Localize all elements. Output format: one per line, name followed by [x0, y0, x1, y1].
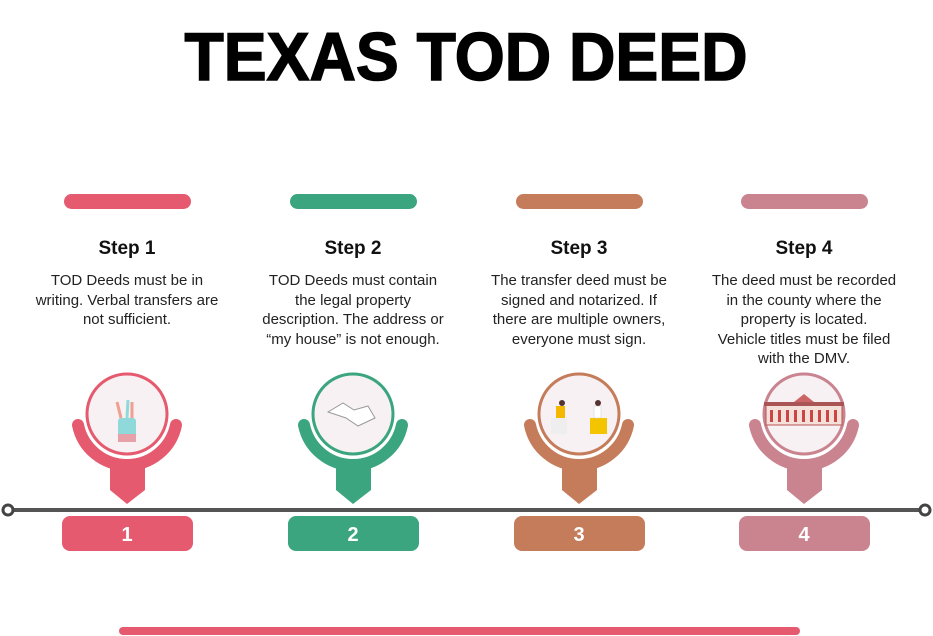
step 1: Step 1	[98, 238, 156, 259]
text: step 4: in the county where the	[726, 292, 882, 309]
text: step 3: signed and notarized. If	[501, 292, 658, 309]
marker 4	[755, 374, 853, 504]
icon: pencil cup	[117, 400, 136, 442]
step 1: 1	[121, 524, 133, 546]
icon: book	[328, 403, 375, 426]
text: step 4: with the DMV.	[757, 350, 850, 367]
text: step 4: The deed must be recorded	[712, 272, 896, 289]
text: step 3: there are multiple owners,	[493, 311, 665, 328]
icon: meeting	[551, 400, 607, 434]
text: step 2: TOD Deeds must contain	[269, 272, 437, 289]
step 2	[262, 194, 444, 551]
marker 1	[78, 374, 176, 504]
step 4: Step 4	[775, 238, 833, 259]
text: step 2: “my house” is not enough.	[266, 331, 440, 348]
step 4: 4	[798, 524, 810, 546]
text: step 4: Vehicle titles must be filed	[718, 331, 890, 348]
text: step 1: not sufficient.	[83, 311, 171, 328]
bottom bar	[119, 627, 800, 635]
text: step 2: the legal property	[295, 292, 411, 309]
step 4	[712, 194, 896, 551]
step 3: 3	[573, 524, 585, 546]
text: step 3: The transfer deed must be	[491, 272, 667, 289]
text: step 3: everyone must sign.	[512, 331, 646, 348]
text: step 1: TOD Deeds must be in	[51, 272, 203, 289]
step 3: Step 3	[550, 238, 608, 259]
icon: courthouse	[764, 394, 844, 425]
text: step 4: property is located.	[741, 311, 867, 328]
marker 3	[530, 374, 628, 504]
timeline	[3, 505, 930, 515]
step 2: Step 2	[324, 238, 382, 259]
marker 2	[304, 374, 402, 504]
text: step 1: writing. Verbal transfers are	[35, 292, 218, 309]
title: TEXAS TOD DEED	[184, 19, 748, 95]
step 1	[35, 194, 218, 551]
step 2: 2	[347, 524, 359, 546]
text: step 2: description. The address or	[262, 311, 444, 328]
step 3	[491, 194, 667, 551]
